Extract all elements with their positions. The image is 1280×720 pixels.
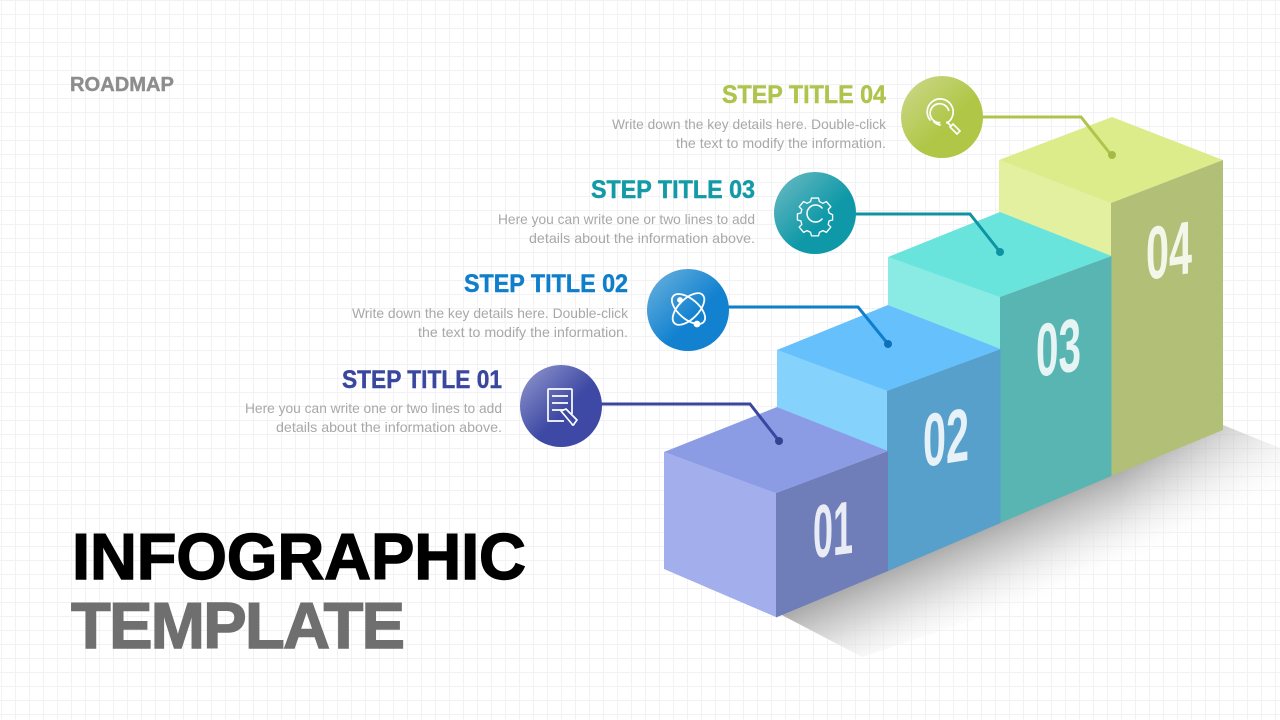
step 04 description: the text to modify the information.: [676, 135, 886, 151]
step 02 description: Write down the key details here. Double-click: [352, 305, 629, 321]
label: roadmap: ROADMAP: [70, 74, 174, 96]
block 03: [888, 212, 1112, 523]
icon: magnifier: [927, 99, 960, 134]
block 04: [999, 117, 1223, 476]
block 01: [664, 407, 888, 618]
step 03 description: [498, 211, 755, 246]
step 04 badge: [901, 76, 983, 158]
step 01: [245, 365, 783, 447]
number 02: 02: [923, 392, 969, 483]
step 02 connector: [726, 307, 892, 348]
step 03 description: Here you can write one or two lines to add: [498, 211, 755, 227]
step 04 description: Write down the key details here. Double-click: [612, 116, 887, 132]
step 01 description: Here you can write one or two lines to add: [245, 400, 502, 416]
step 01 description: details about the information above.: [276, 419, 502, 435]
step 02 heading: STEP TITLE 02: [464, 270, 628, 298]
icon: document and pen: [548, 389, 577, 425]
number 04: 04: [1146, 205, 1192, 296]
step 03 connector: [853, 214, 1004, 256]
step 02 badge: [647, 269, 729, 351]
icon: atom: [667, 288, 710, 330]
title: INFOGRAPHIC: [72, 520, 526, 593]
icon: gear: [797, 198, 833, 236]
step 04: [612, 76, 1116, 159]
title: TEMPLATE: [71, 589, 405, 662]
block 02: [777, 305, 1000, 572]
step 03 description: details about the information above.: [529, 230, 755, 246]
step 02 description: the text to modify the information.: [418, 324, 628, 340]
block 01: 01: [813, 485, 853, 574]
title: [71, 520, 526, 662]
step 04 heading: STEP TITLE 04: [722, 81, 886, 109]
step 01 badge: [520, 365, 602, 447]
step 04 description: [612, 116, 887, 151]
step 03: [498, 172, 1004, 256]
staircase shadow: [776, 425, 1280, 657]
number 03: 03: [1036, 302, 1081, 393]
step 04 connector: [980, 117, 1116, 159]
step 02: [352, 269, 892, 351]
step 01 heading: STEP TITLE 01: [342, 366, 502, 394]
step 03 heading: STEP TITLE 03: [591, 176, 755, 204]
step 03 badge: [774, 172, 856, 254]
step 02 description: [352, 305, 629, 340]
step 01 connector: [599, 404, 783, 445]
step 01 description: [245, 400, 502, 435]
